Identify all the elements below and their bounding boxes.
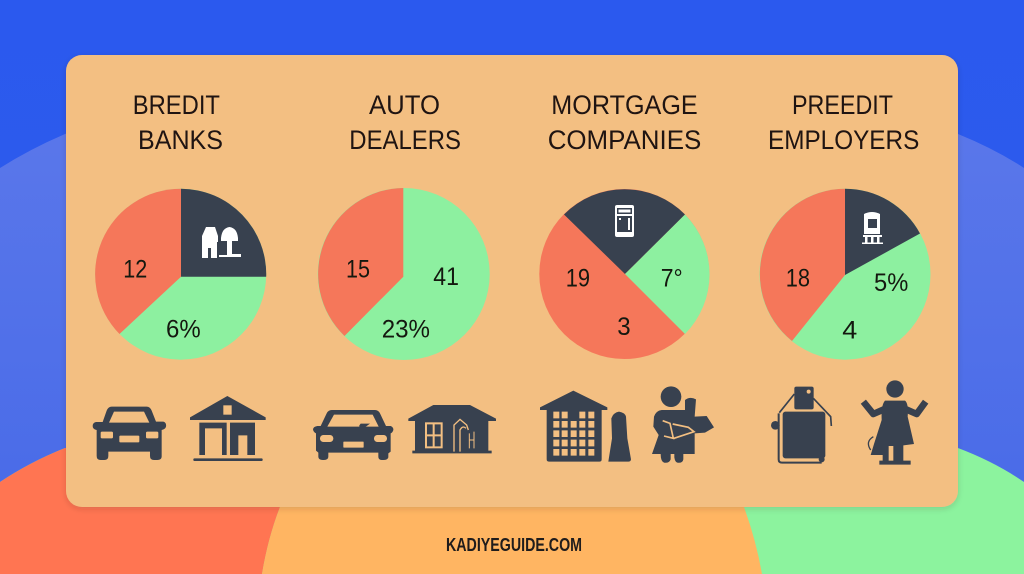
pie chart: Preedit Employers [760,189,930,360]
column: Bredit Banks [93,90,266,461]
icon: figure and table [202,227,241,258]
column: Mortgage Companies [539,90,714,463]
pie chart: Auto Dealers [318,188,490,360]
heading: Mortgage Companies: COMPANIES [548,125,701,155]
panel: credit sources card [66,55,958,507]
icon: car with cracked windshield [313,410,393,460]
column: Auto Dealers [313,90,496,460]
pie chart: Mortgage Companies [539,189,710,359]
pie chart: Auto Dealers: 41 [433,263,459,291]
pie chart: Preedit Employers: 18 [786,265,810,293]
column: Preedit Employers [760,90,930,465]
icon: tablet [615,205,634,237]
heading: Mortgage Companies: MORTGAGE [551,90,698,120]
heading: Preedit Employers [768,90,919,155]
pie chart: Mortgage Companies: 7° [661,265,683,293]
pie chart: Auto Dealers: 15 [346,256,370,284]
icon: appliance with strap [771,387,831,463]
icon: person with raised arms [863,380,926,465]
icon: apartment building [540,391,631,462]
pie chart: Mortgage Companies: 19 [566,265,590,293]
heading: Auto Dealers: DEALERS [349,125,461,155]
pie chart: Preedit Employers: 5% [874,269,908,297]
heading: Bredit Banks [133,90,223,155]
heading: Mortgage Companies [548,90,701,155]
heading: Preedit Employers: EMPLOYERS [768,125,919,155]
pie chart: Auto Dealers: 23% [382,315,430,343]
heading: Preedit Employers: PREEDIT [792,90,893,120]
pie chart: Bredit Banks: 6% [166,315,201,343]
icon: person holding documents [652,386,714,463]
footer: site name: KADIYEGUIDE.COM [446,535,582,555]
pie chart: Bredit Banks [95,189,266,360]
heading: Bredit Banks: BANKS [138,125,223,155]
pie chart: Bredit Banks: 12 [123,256,147,284]
pie chart: Preedit Employers: 4 [842,316,857,344]
icon: house with door [408,405,496,453]
heading: Bredit Banks: BREDIT [133,90,220,120]
icon: kiosk building [862,212,883,244]
icon: car [93,407,166,460]
pie chart: Mortgage Companies: 3 [617,313,631,341]
heading: Auto Dealers: AUTO [369,90,440,120]
icon: house [190,396,266,461]
heading: Auto Dealers [349,90,461,155]
